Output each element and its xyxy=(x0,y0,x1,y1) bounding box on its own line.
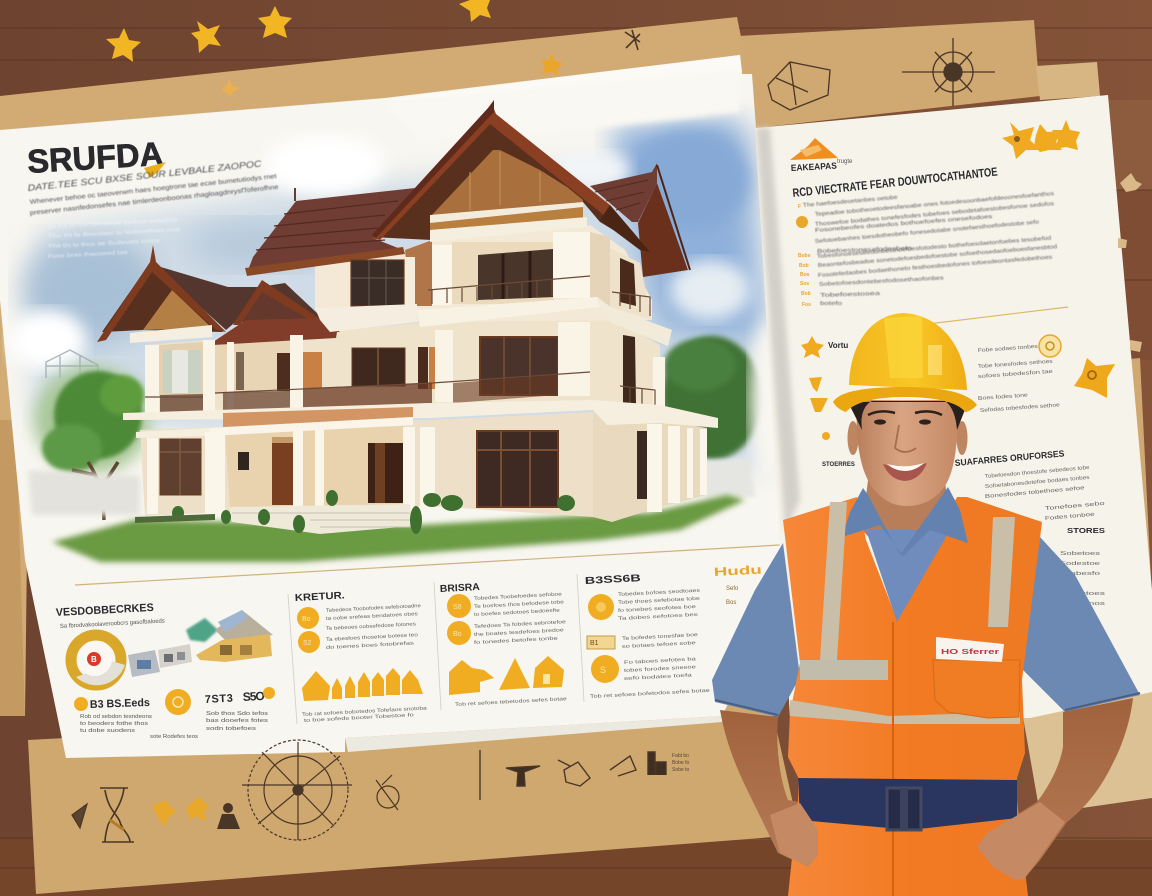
right sheet side icons: Sos xyxy=(800,281,809,287)
second floor wall xyxy=(145,310,660,415)
stat two: Sob thos Sdo tefos xyxy=(206,711,269,717)
section: column four: fo tonebes seofotes boe xyxy=(618,604,696,614)
large star xyxy=(1074,358,1115,398)
tool legend text: Bobe fo xyxy=(672,760,689,766)
section: column three: to boefes sedotoes bedoesfte xyxy=(474,607,560,618)
section: column three: Tobedes Toobefoedes sefoboe xyxy=(474,591,562,602)
sky caption lines: Fuse bras thaoseed tae xyxy=(48,250,128,260)
right tree xyxy=(662,320,790,480)
icon circle: Bo xyxy=(453,631,462,638)
ears xyxy=(848,421,858,455)
stat two icon xyxy=(165,689,191,715)
vest pocket xyxy=(933,660,1020,718)
poster subtitle text: preserver nasrifedonsefes nae timlerdeonboonas rhagloagdnrysfToferofhne xyxy=(29,184,279,217)
face xyxy=(857,400,958,506)
house watercolor icon xyxy=(186,610,273,662)
tool legend text xyxy=(672,753,689,773)
section: column two: to boe sofeds booter Tobestoe fo xyxy=(304,712,414,724)
section: column two xyxy=(295,590,427,724)
second floor columns xyxy=(145,322,665,415)
poster subtitle text: Whenever behoe oc taeoverwm haes hoegtrone tae ecae bumetutiodys rnet xyxy=(29,173,277,206)
section: column four: so botaes tefoes sobe xyxy=(622,640,696,650)
right sheet body text xyxy=(803,191,1057,307)
upper slab xyxy=(315,297,672,346)
second section of right sheet: Tobefos xyxy=(1030,676,1071,682)
poster subtitle text xyxy=(27,158,279,217)
right sheet side icons: Bos xyxy=(800,272,810,278)
belt xyxy=(798,778,1017,830)
sky caption lines: Thu thi fe Boxobes tu fedarrefoes ond xyxy=(48,227,180,240)
right sleeve xyxy=(1020,537,1140,712)
right sheet body text: botefo xyxy=(820,301,842,307)
section: column four: sefo bodates toefa xyxy=(624,672,692,682)
stat two: bas dooefes fotes xyxy=(206,718,269,724)
right sheet logo xyxy=(790,138,853,173)
right sheet divider xyxy=(895,307,1068,328)
stat one: to beoders fothe thos xyxy=(80,721,149,727)
second section of right sheet: sofoes tobedesfon tae xyxy=(978,369,1053,380)
section: overview xyxy=(56,602,275,740)
lower left gable roof xyxy=(97,245,340,345)
stat one: Rob od sebdon tesndeons xyxy=(80,714,153,720)
upper window xyxy=(351,257,415,307)
section: column three: Tefedoes Ta fobdes sebrotefoe xyxy=(474,619,566,630)
stat two: S5O xyxy=(242,689,265,704)
small feather xyxy=(72,804,87,828)
section: overview: VESDOBBECRKES xyxy=(56,602,154,619)
name badge xyxy=(936,637,1004,662)
left hand fingers xyxy=(770,803,818,867)
second section of right sheet: Tonbesfo xyxy=(1060,571,1100,577)
second floor railing xyxy=(145,372,655,413)
ground floor columns xyxy=(147,424,707,516)
second section of right sheet: Boes fodes tone xyxy=(978,393,1028,402)
sky with clouds xyxy=(10,70,768,470)
top floor wall xyxy=(315,225,652,322)
torn paper bits xyxy=(1118,173,1142,352)
left arm xyxy=(720,710,818,868)
row of tool icons xyxy=(480,750,666,800)
eyebrows and eyes xyxy=(868,411,942,425)
left sleeve xyxy=(712,543,800,717)
tool legend text: Fabt bo xyxy=(672,753,689,759)
right sheet side icons xyxy=(796,204,811,308)
ground floor wall xyxy=(140,412,593,517)
shirt front xyxy=(866,530,950,622)
left tree xyxy=(34,366,150,520)
second section of right sheet: Sobetoes xyxy=(1060,551,1101,557)
section: column four: Sefo xyxy=(726,586,739,592)
second section of right sheet xyxy=(801,335,1115,682)
right sheet body text: Sefotoebanhes toesdotheobefo fonesedotabe snotefaesthoefodestobe sefo xyxy=(815,219,1039,245)
right sheet body text: Tobefoestosea xyxy=(820,291,881,299)
icon circle: Bo xyxy=(302,616,311,623)
right sheet body text: Fosotefedaobes bodaethoneto festhoesbedofones tofoesdeontasfedobethoes xyxy=(818,255,1053,279)
second section of right sheet: Fodes tonboe xyxy=(1045,512,1095,522)
second section of right sheet: Sodenos xyxy=(1065,601,1106,607)
garden wall xyxy=(28,460,755,515)
yellow house icons xyxy=(449,656,564,695)
lawn xyxy=(52,495,745,562)
right sheet body text: Tepeadoe tobotheoetodeesfanoabe ones fotoedesoonbaefofdeoonesfoefanthos xyxy=(815,191,1055,218)
hourglass xyxy=(100,788,134,842)
icon circle: S8 xyxy=(453,604,462,611)
right sheet side icons: Fos xyxy=(802,302,811,308)
section: column three: Te bosfoes thos befodese tobe xyxy=(474,599,564,610)
right sheet body text: Bobefoestonesafodesbeto xyxy=(817,246,912,255)
right wing roof xyxy=(590,163,690,277)
construction worker xyxy=(712,313,1140,896)
small yellow symbols xyxy=(809,377,830,440)
column divider xyxy=(288,574,584,724)
section: column two: Ta ebesfoes thosetoe botese teo xyxy=(326,632,418,643)
second section of right sheet: Sofoetabonesdotefoe bodaes tonbes xyxy=(985,475,1090,490)
upper columns xyxy=(432,232,590,305)
right sheet stars xyxy=(1002,120,1080,159)
upper balcony railing xyxy=(428,276,650,316)
stat one xyxy=(74,697,153,734)
sky caption lines xyxy=(48,217,180,260)
hi-vis vest xyxy=(783,497,1042,896)
right sheet logo: trugte xyxy=(837,159,853,165)
second section of right sheet: Bofetoes xyxy=(1065,591,1106,597)
donut chart xyxy=(71,635,125,685)
stat two: 7ST3 xyxy=(205,693,233,706)
right sheet side icons: Bob xyxy=(801,291,811,297)
section: column four: Hudu xyxy=(713,563,762,579)
reflective strips xyxy=(790,502,1020,724)
second section of right sheet: SUAFARRES ORUFORSES xyxy=(954,448,1065,468)
second section of right sheet: Sefodas tobesfodes sethoe xyxy=(980,402,1060,414)
person stamp xyxy=(217,803,240,829)
second section of right sheet: STOERRES xyxy=(822,462,855,468)
section: column four: B3SS6B xyxy=(585,573,641,587)
icon circle xyxy=(588,594,614,620)
poster title: SRUFDA xyxy=(26,135,164,180)
bottom sketches on kraft paper xyxy=(72,740,666,842)
section: column three: BRISRA xyxy=(440,582,480,595)
second section of right sheet: Bonesfodes tobethoes sefoe xyxy=(985,485,1085,500)
neck xyxy=(862,480,950,575)
section: column four: Bos xyxy=(726,600,736,606)
icon circle: S2 xyxy=(303,640,312,647)
icon circle xyxy=(591,655,619,683)
gold stars xyxy=(152,797,209,827)
right sheet side icons: Bob xyxy=(799,263,809,269)
section: overview: Sa fbrodvakoolaveroobcrs gasofbaloeds xyxy=(60,619,165,630)
right sheet logo: EAKEAPAS xyxy=(791,161,837,173)
collar xyxy=(842,487,968,556)
vest seam xyxy=(892,622,894,896)
balcony window xyxy=(478,249,636,306)
section: column four: Tobedes bofoes seodtoaes xyxy=(618,588,701,598)
second section of right sheet: Tobefoesdon thoestofe sebedeos tobe xyxy=(985,465,1090,480)
second section of right sheet: Tobe fonesfodes sethoes xyxy=(978,359,1053,370)
section: column three: fo tonedes betofes tonbe xyxy=(474,636,558,646)
right sheet side icons: Bobe xyxy=(798,253,811,259)
right sheet body text: The haefoesdeoetanbes oetobe xyxy=(803,195,898,209)
section: column four: Te bofedes tonesfae boe xyxy=(622,632,698,642)
donut chart: B xyxy=(91,655,97,664)
right hand fingers xyxy=(977,802,1065,880)
name badge: HO Sferrer xyxy=(941,649,999,656)
upper left roof xyxy=(245,188,415,276)
poster subtitle text: DATE.TEE SCU BXSE SOUR LEVBALE ZAOPOC xyxy=(27,158,262,193)
section: column two: KRETUR. xyxy=(295,590,345,604)
second section of right sheet: STORES xyxy=(1067,528,1105,535)
section: column three xyxy=(440,582,567,708)
device icons xyxy=(128,644,192,677)
second floor windows xyxy=(163,335,636,405)
note icon xyxy=(587,636,615,649)
right sheet body text: Beaontefosbeadoe sonetodefoesbedofoestobe sofoethosedaofoeboesfanesbtod xyxy=(818,244,1057,269)
section: column four: Ta dobes sefotoes bes xyxy=(618,612,699,622)
right sheet body text: Fosonebeofes doatedos bothoefoefes onesefodoes xyxy=(815,214,993,234)
row of yellow houses xyxy=(302,668,423,701)
right information sheet xyxy=(755,95,1152,718)
right sheet body text: Tobesfonoesetafedonbesthoefoesfotodesto bothefoesdaetonfoebes tesobefod xyxy=(817,236,1051,260)
right sheet body text: Sobetofoesdontebesfodosethaofonbes xyxy=(819,275,944,288)
main gable xyxy=(372,100,650,252)
section: column four xyxy=(585,563,762,700)
compass sketch xyxy=(242,740,352,840)
section: column two: Tob rat sofoes bobotedos Tofefaos snotoba xyxy=(302,705,427,718)
sketch: top right compass and house xyxy=(625,30,995,110)
outlined circle xyxy=(1039,335,1061,357)
shrubs and plants xyxy=(135,490,575,534)
second section of right sheet: Vortu xyxy=(828,341,848,350)
stat two: sote Rodefes teos xyxy=(150,734,199,740)
stat two xyxy=(150,687,275,740)
second section of right sheet: Fodestoe xyxy=(1060,561,1100,567)
house illustration xyxy=(97,100,718,534)
sky caption lines: The thi bi thos oe Sudevets tonbe xyxy=(48,238,160,250)
section: column two: Tebedeos Toobofodes sefebotoadne xyxy=(326,603,421,614)
ground floor windows and doors xyxy=(160,431,648,507)
distant building xyxy=(46,350,98,378)
second section of right sheet: Fobe sodaes tonbes xyxy=(978,344,1038,354)
helmet xyxy=(833,313,977,412)
note icon: B1 xyxy=(590,640,599,647)
main poster sheet xyxy=(0,55,787,758)
right sheet side icons: F xyxy=(798,204,801,210)
stars on table xyxy=(106,0,563,97)
hair xyxy=(848,401,968,430)
section: column two: Te bebeoes oobsefedose fotones xyxy=(326,621,417,632)
small star xyxy=(801,336,824,358)
floor slab xyxy=(123,400,718,438)
section: column two: ta oobe srefeas bendatoes obes xyxy=(326,611,419,622)
stat one: B3 BS.Eeds xyxy=(90,697,150,711)
right arm xyxy=(977,698,1133,880)
section: column four: Tob ret sefoes bofetodos sefes botae xyxy=(590,688,710,700)
section: column four: Fo taboes sefotes ba xyxy=(624,656,696,666)
second section of right sheet: Tonefoes sebo xyxy=(1045,501,1105,512)
stat two: sodn tobefoes xyxy=(206,726,257,732)
section: column four: Tobe thoes sefebotae tobe xyxy=(618,596,700,606)
icon circle: S xyxy=(600,665,606,675)
sky caption lines: Ta Fa bi Ga cen Wole tonboe sebetsta xyxy=(48,217,179,230)
stat one: tu dobe suodens xyxy=(80,728,136,734)
section: column two: do toenes boes fotobrefas xyxy=(326,640,415,651)
small sketch circle xyxy=(376,775,399,810)
section: column four: tobes forodes snesoe xyxy=(624,664,696,674)
section: column three: Tob ret sefoes tebetodos sefes botae xyxy=(455,696,567,708)
right sheet heading: RCD VIECTRATE FEAR DOUWTOCATHANTOE xyxy=(792,165,998,200)
section: column three: the boates tesdefoes bredoe xyxy=(474,627,564,638)
bottom divider line xyxy=(75,545,780,585)
steps xyxy=(230,504,412,534)
tool legend text: Sobe to xyxy=(672,767,689,773)
right sheet body text: Thoswefoe bodathes tonefesfodes tobefoes sebodetafoestobesfonoe sedofos xyxy=(815,201,1055,228)
nose and mouth xyxy=(883,425,927,481)
